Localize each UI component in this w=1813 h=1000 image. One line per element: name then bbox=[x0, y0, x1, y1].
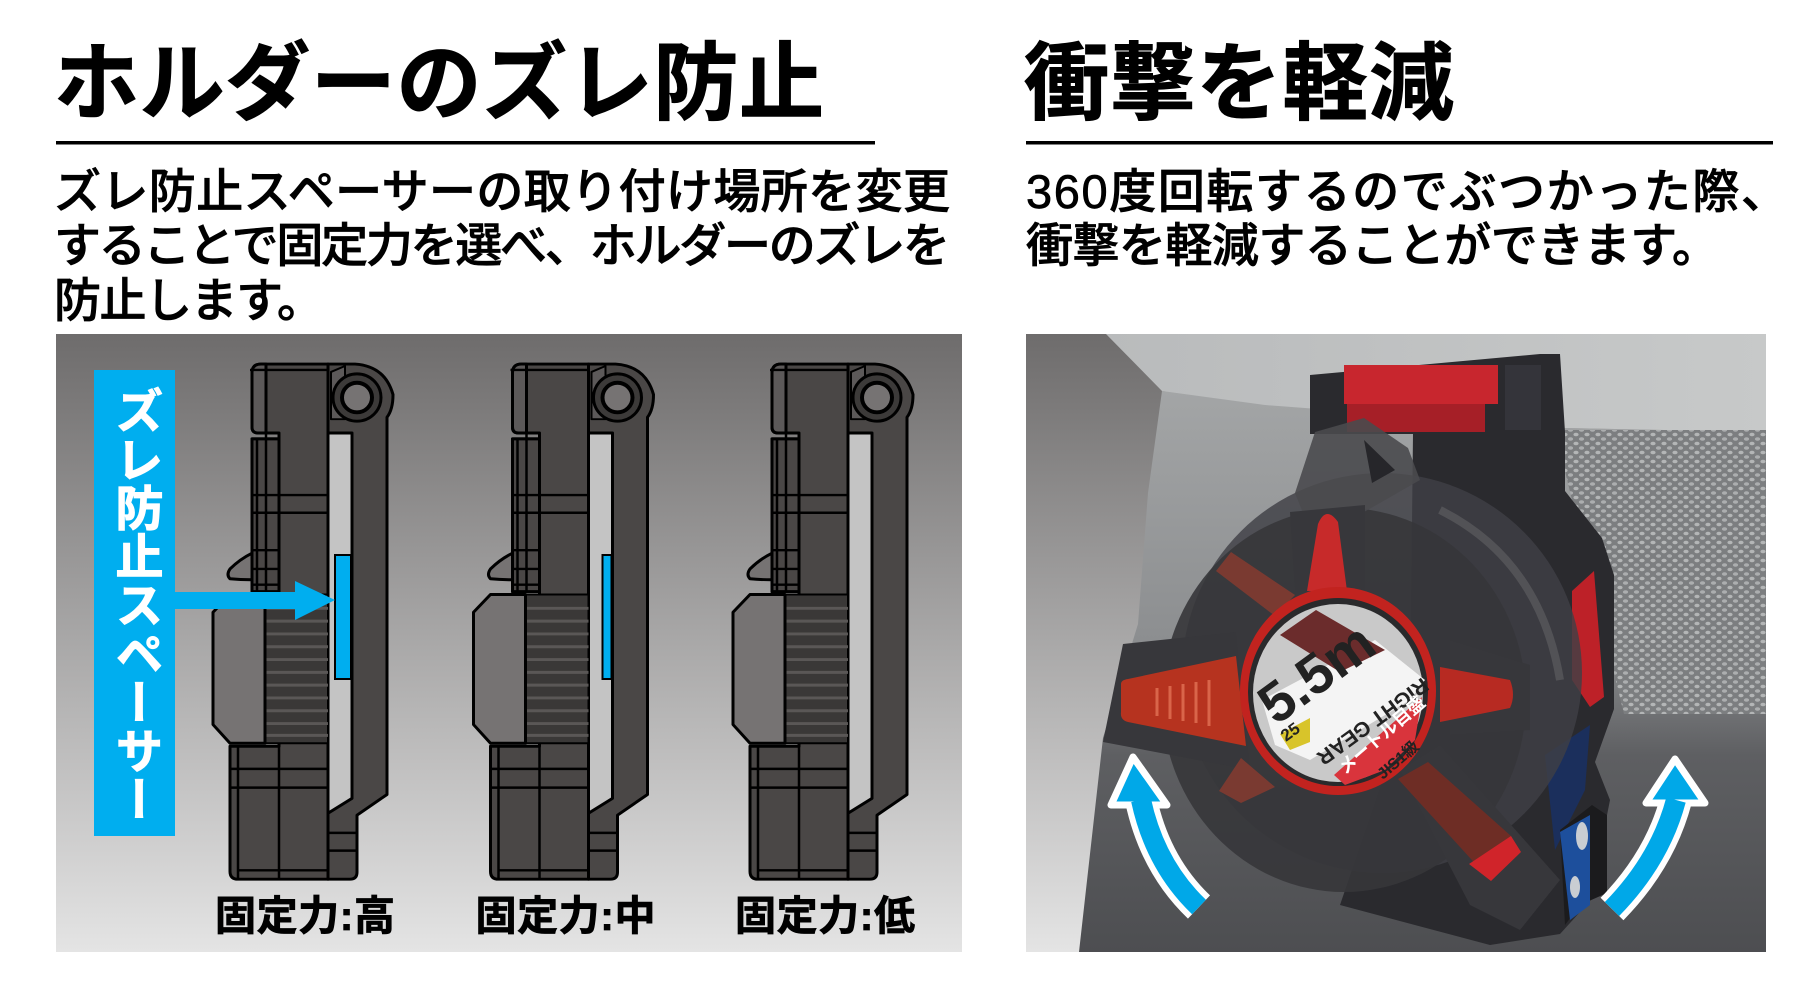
red blade: right bbox=[1440, 667, 1513, 722]
translucent blade: lower left bbox=[1219, 758, 1275, 803]
shirt bbox=[1106, 334, 1766, 432]
translucent blade: upper left bbox=[1216, 552, 1295, 616]
tape measure body: 25 bbox=[1277, 719, 1304, 745]
text block: left description bbox=[54, 165, 950, 327]
red side latch bbox=[1572, 571, 1604, 707]
arrow: right rotation bbox=[1612, 759, 1705, 909]
tape measure body bbox=[1103, 418, 1582, 930]
red blade: top bbox=[1307, 514, 1347, 591]
arrow: left rotation bbox=[1111, 757, 1199, 907]
text block: left description: することで固定力を選べ、ホルダーのズレを bbox=[54, 219, 950, 272]
arrow: spacer pointer bbox=[175, 581, 335, 620]
red ring bbox=[1240, 587, 1436, 795]
belt holder bbox=[1310, 354, 1614, 945]
holder diagram: fixing force medium bbox=[474, 364, 656, 939]
caption: 固定力:高: 固定力:高 bbox=[215, 893, 395, 939]
pants bbox=[1079, 391, 1766, 952]
title: 衝撃を軽減: 衝撃を軽減 bbox=[1024, 37, 1454, 132]
blue holder edge bbox=[1545, 725, 1590, 850]
red blade: left grip bbox=[1121, 656, 1246, 746]
belt webbing bbox=[1555, 430, 1766, 714]
text block: right description: 衝撃を軽減することができます。 bbox=[1026, 219, 1719, 272]
text block: right description bbox=[1026, 165, 1788, 272]
callout: spacer label bbox=[94, 370, 175, 836]
caption: 固定力:中: 固定力:中 bbox=[476, 893, 656, 939]
text block: left description: ズレ防止スペーサーの取り付け場所を変更 bbox=[54, 165, 950, 218]
text block: left description: 防止します。 bbox=[54, 274, 324, 327]
panel: tape measure photo bbox=[1026, 334, 1766, 952]
callout: spacer label: ズレ防止スペーサー bbox=[108, 386, 162, 823]
tape measure body: JIS1級 bbox=[1374, 737, 1423, 783]
text block: right description: 360度回転するのでぶつかった際、 bbox=[1026, 165, 1788, 218]
panel: holder diagrams bbox=[56, 334, 962, 952]
metal clip bbox=[1560, 805, 1607, 925]
caption: 固定力:低: 固定力:低 bbox=[735, 893, 915, 939]
dial label bbox=[1253, 604, 1423, 782]
tape measure body: RIGHT GEAR bbox=[1312, 673, 1433, 769]
red blade: lower right grip bbox=[1398, 762, 1511, 881]
holder diagram: fixing force low bbox=[733, 364, 915, 939]
tape measure body: 5.5m bbox=[1246, 610, 1386, 736]
divider: left heading rule bbox=[56, 141, 875, 144]
red release button bbox=[1344, 365, 1498, 404]
title: ホルダーのズレ防止: ホルダーのズレ防止 bbox=[54, 37, 824, 132]
divider: right heading rule bbox=[1026, 141, 1773, 144]
tape measure body: メートル目盛 bbox=[1334, 691, 1429, 778]
holder diagram: fixing force high bbox=[213, 364, 395, 939]
